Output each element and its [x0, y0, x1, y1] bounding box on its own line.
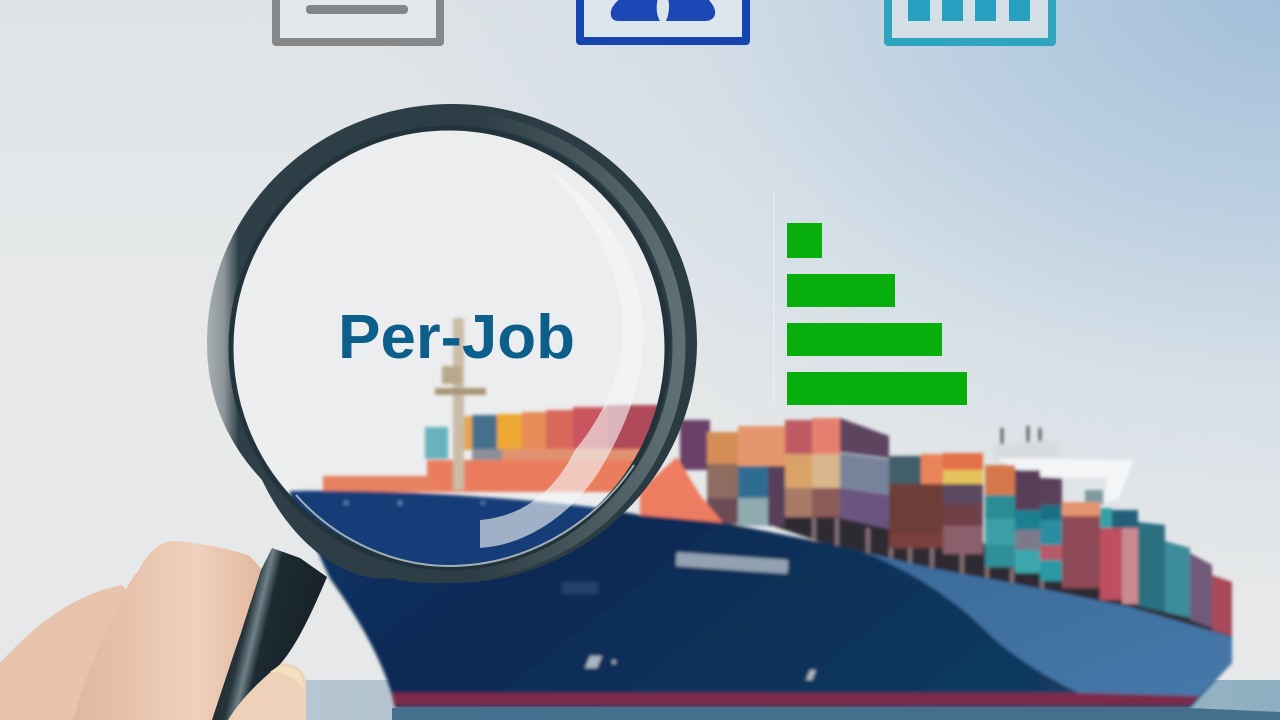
container stack: middle bay [889, 453, 983, 554]
rim dark inner line [231, 128, 667, 568]
lifeboat shape [640, 457, 724, 524]
hull markings [562, 582, 816, 680]
thumb nail [270, 666, 305, 690]
rim grey right band [223, 118, 679, 574]
deck supports under containers [726, 505, 1232, 640]
ship mast [435, 318, 486, 490]
green bar chart [773, 192, 967, 405]
magnifier handle [212, 548, 327, 720]
lens [233, 130, 665, 566]
icon: blue people card [580, 0, 746, 41]
magnifying glass [207, 104, 724, 600]
magnified hull [288, 488, 598, 565]
thumb [228, 663, 306, 720]
ship superstructure [992, 426, 1134, 504]
hand holding magnifier [0, 541, 327, 720]
magnified containers [320, 402, 658, 496]
back finger [0, 585, 170, 720]
icon: grey document card [276, 0, 440, 42]
container stack: aft bay [985, 465, 1232, 636]
icon: teal bar-chart card [888, 0, 1052, 42]
hull dark bow [294, 491, 1232, 708]
lens glare [480, 402, 632, 548]
water under hull [392, 708, 1280, 720]
hull rivets [344, 500, 485, 506]
container ship [294, 418, 1232, 708]
container stack: forward bay [680, 418, 889, 529]
hull light side [860, 551, 1232, 696]
lens contents [288, 316, 658, 565]
label: Per-Job: Per-Job [338, 303, 575, 372]
sea [300, 680, 1280, 720]
stern pillars [812, 518, 1044, 595]
rim [207, 104, 697, 583]
top icons row [276, 0, 1052, 42]
index finger [73, 541, 262, 720]
hull name [676, 552, 788, 574]
red waterline band [392, 693, 1199, 705]
rim inner highlight [296, 465, 634, 566]
